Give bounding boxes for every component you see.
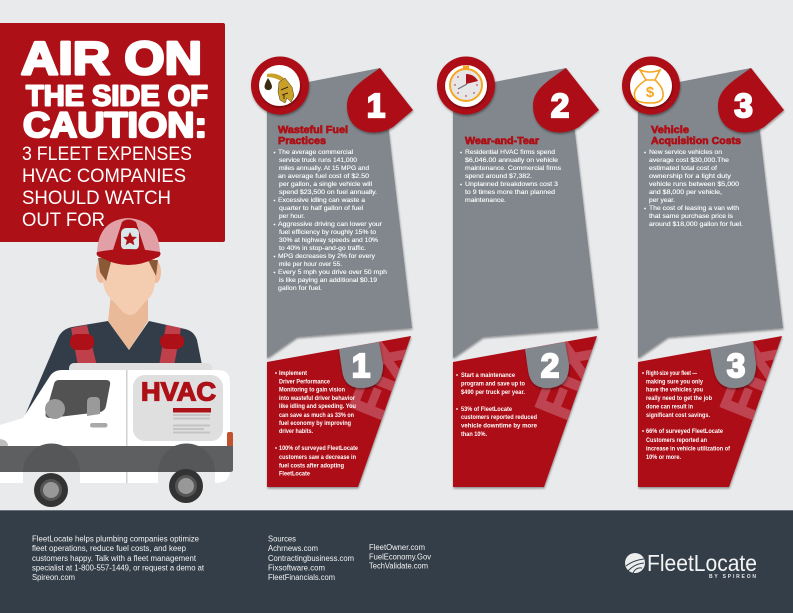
fix text: Start a maintenance: [461, 372, 515, 379]
van signage: [133, 375, 223, 441]
fix text: Customers reported an: [646, 437, 707, 444]
fix text: FleetLocate: [279, 470, 310, 478]
sources column 2: TechValidate.com: [369, 562, 428, 570]
sources column 1: FleetFinancials.com: [268, 573, 335, 582]
fuel facts text: Aggressive driving can lower your: [278, 221, 383, 228]
watermark FIX: FIX: [710, 333, 791, 426]
fix text: increase in vehicle utilization of: [646, 446, 731, 452]
company blurb: Spireon.com: [32, 573, 75, 582]
fuel facts text: gallon for fuel.: [278, 285, 322, 292]
costs text: ownership for a light duty: [649, 173, 732, 180]
logo: [625, 550, 757, 580]
sources column 1: Sources: [268, 534, 296, 544]
costs text: estimated total cost of: [649, 165, 717, 172]
tab number 3: [710, 341, 756, 388]
number badge 2: 2: [551, 87, 569, 124]
costs text: per year.: [649, 197, 675, 204]
sources column 1: [268, 534, 354, 582]
sources column 1: Fixsoftware.com: [268, 564, 325, 572]
window: [46, 380, 110, 418]
fix text: 66% of surveyed FleetLocate: [646, 428, 723, 435]
fuel facts text: mile per hour over 55.: [279, 261, 342, 268]
heading: [651, 124, 741, 147]
fuel facts text: service truck runs 141,000: [279, 157, 357, 164]
fix text: Implement: [279, 370, 308, 377]
bumper band: [0, 446, 233, 472]
logo: FleetLocate: [647, 550, 757, 576]
sources column 1: Contractingbusiness.com: [268, 554, 354, 563]
icon: fuel nozzle: [251, 56, 309, 114]
panel: fix 1: [267, 333, 420, 487]
panel: wasteful fuel practices: [251, 56, 413, 358]
fix text: Driver Performance: [279, 378, 330, 386]
fuel facts text: [274, 149, 387, 292]
subheading: 3 FLEET EXPENSES: [22, 143, 192, 165]
fuel facts text: is like paying an additional $0.19: [279, 277, 377, 284]
tab number 2: [525, 342, 569, 388]
fix text: into wasteful driver behavior: [279, 395, 355, 402]
fix text: fuel costs after adopting: [279, 462, 344, 470]
fix text: really need to get the job: [646, 395, 712, 402]
main heading: CAUTION:: [23, 106, 207, 145]
illustration: HVAC van: [0, 363, 233, 507]
fix text: customers reported reduced: [461, 414, 537, 421]
costs text: The cost of leasing a van with: [649, 205, 739, 212]
fuel facts text: spend $23,500 on fuel annually.: [279, 189, 377, 196]
fix text: fuel economy by improving: [279, 420, 351, 427]
head: [96, 256, 161, 315]
tab number 1: [339, 342, 383, 388]
heading: Wasteful Fuel: [278, 124, 348, 136]
neck: [108, 295, 148, 350]
company blurb: customers happy. Talk with a fleet management: [32, 554, 197, 563]
fuel facts text: 30% at highway speeds and 10%: [279, 237, 378, 244]
tab number 3: 3: [727, 347, 745, 384]
main heading: AIR ON: [21, 32, 202, 84]
heading: Practices: [278, 135, 326, 147]
icon: money bag: $: [646, 84, 655, 101]
wear text: spend around $7,382.: [465, 173, 532, 180]
fix text: 100% of surveyed FleetLocate: [279, 445, 358, 452]
fix text: 53% of FleetLocate: [461, 406, 512, 413]
fuel facts text: quarter to half gallon of fuel: [279, 205, 363, 212]
wear text: Unplanned breakdowns cost 3: [465, 181, 558, 188]
van body: [0, 370, 230, 483]
number badge 1: [347, 68, 413, 132]
fuel facts text: to 40% in stop-and-go traffic.: [279, 245, 366, 252]
footer: [0, 510, 793, 613]
sources column 2: FleetOwner.com: [369, 543, 425, 552]
fix text: can save as much as 33% on: [279, 412, 354, 419]
company blurb: FleetLocate helps plumbing companies optimize: [32, 534, 200, 544]
icon: money bag: [622, 56, 680, 114]
number badge 2: [533, 68, 599, 132]
sources column 2: FuelEconomy.Gov: [369, 553, 431, 562]
tab number 2: 2: [541, 347, 559, 384]
icon: stopwatch: [437, 56, 495, 114]
fuel facts text: an average fuel cost of $2.50: [278, 173, 369, 180]
number badge 3: 3: [734, 87, 753, 124]
illustration: technician: [23, 218, 213, 420]
fix text: program and save up to: [461, 380, 525, 388]
heading: Vehicle: [651, 124, 689, 136]
fix text: vehicle downtime by more: [461, 422, 537, 430]
costs text: that same purchase price is: [649, 213, 734, 220]
fix text: [642, 370, 731, 461]
company blurb: fleet operations, reduce fuel costs, and keep: [32, 544, 187, 553]
fix text: Right-size your fleet —: [646, 370, 697, 377]
wear text: to 9 times more than planned: [465, 189, 555, 196]
tab number 1: 1: [352, 347, 370, 384]
fuel facts text: Excessive idling can waste a: [278, 197, 365, 204]
fix text: have the vehicles you: [646, 386, 703, 394]
fix text: making sure you only: [646, 378, 703, 386]
subheading: HVAC COMPANIES: [22, 165, 186, 187]
wear text: Residential HVAC firms spend: [465, 149, 555, 156]
fix text: [275, 370, 358, 478]
fuel facts text: per hour.: [279, 213, 305, 220]
number badge 1: 1: [367, 87, 385, 124]
wear text: [460, 149, 562, 204]
subheading: OUT FOR: [22, 209, 105, 231]
fuel facts text: miles annually. At 15 MPG and: [279, 165, 369, 172]
costs text: vehicle runs between $5,000: [649, 181, 739, 188]
wear text: $6,046.00 annually on vehicle: [465, 157, 558, 164]
fuel facts text: Every 5 mph you drive over 50 mph: [278, 269, 387, 276]
suspenders: [70, 325, 184, 366]
fuel facts text: The average commercial: [278, 149, 353, 156]
heading: Acquisition Costs: [651, 135, 741, 147]
wear text: maintenance. Commercial firms: [465, 165, 562, 172]
panel: wear and tear: [437, 56, 599, 358]
heading: [278, 124, 348, 147]
costs text: around $18,000 gallon for fuel.: [649, 221, 743, 228]
fix text: Monitoring to gain vision: [279, 386, 345, 394]
watermark FIX: FIX: [525, 333, 606, 426]
fix text: done can result in: [646, 404, 693, 410]
number badge 3: [718, 68, 784, 132]
fix text: customers saw a decrease in: [279, 454, 356, 461]
fix text: than 10%.: [461, 431, 487, 438]
panel: fix 2: [453, 333, 606, 487]
sources column 2: [369, 543, 431, 570]
fix text: [456, 372, 537, 438]
costs text: average cost $30,000.The: [649, 157, 729, 164]
van signage: HVAC: [141, 376, 216, 406]
sources column 1: Achrnews.com: [268, 544, 318, 553]
fix text: 10% or more.: [646, 454, 681, 461]
fix text: $490 per truck per year.: [461, 389, 525, 396]
title panel: [0, 23, 225, 242]
wear text: maintenance.: [465, 197, 506, 204]
wheels: [34, 469, 203, 507]
fuel facts text: per gallon, a single vehicle will: [279, 181, 372, 188]
helmet: [97, 218, 160, 265]
fuel facts text: fuel efficiency by roughly 15% to: [279, 229, 376, 236]
torso: [23, 321, 213, 420]
company blurb: specialist at 1-800-557-1449, or request a demo at: [32, 564, 205, 572]
watermark FIX: FIX: [339, 333, 420, 426]
main heading: THE SIDE OF: [26, 80, 208, 112]
costs text: [644, 149, 743, 228]
subheading: SHOULD WATCH: [22, 187, 171, 209]
fix text: significant cost savings.: [646, 412, 710, 419]
costs text: and $8,000 per vehicle,: [649, 189, 722, 196]
main heading: [21, 32, 208, 145]
fix text: like idling and speeding. You: [279, 403, 356, 410]
heading: Wear-and-Tear: [465, 135, 539, 147]
subheading: [22, 143, 192, 231]
panel: vehicle acquisition costs: [622, 56, 784, 358]
fix text: driver habits.: [279, 428, 313, 435]
logo: BY SPIREON: [709, 574, 756, 580]
panel: fix 3: [638, 333, 791, 487]
company blurb: [32, 534, 205, 582]
fuel facts text: MPG decreases by 2% for every: [278, 253, 376, 260]
costs text: New service vehicles on: [649, 149, 722, 156]
